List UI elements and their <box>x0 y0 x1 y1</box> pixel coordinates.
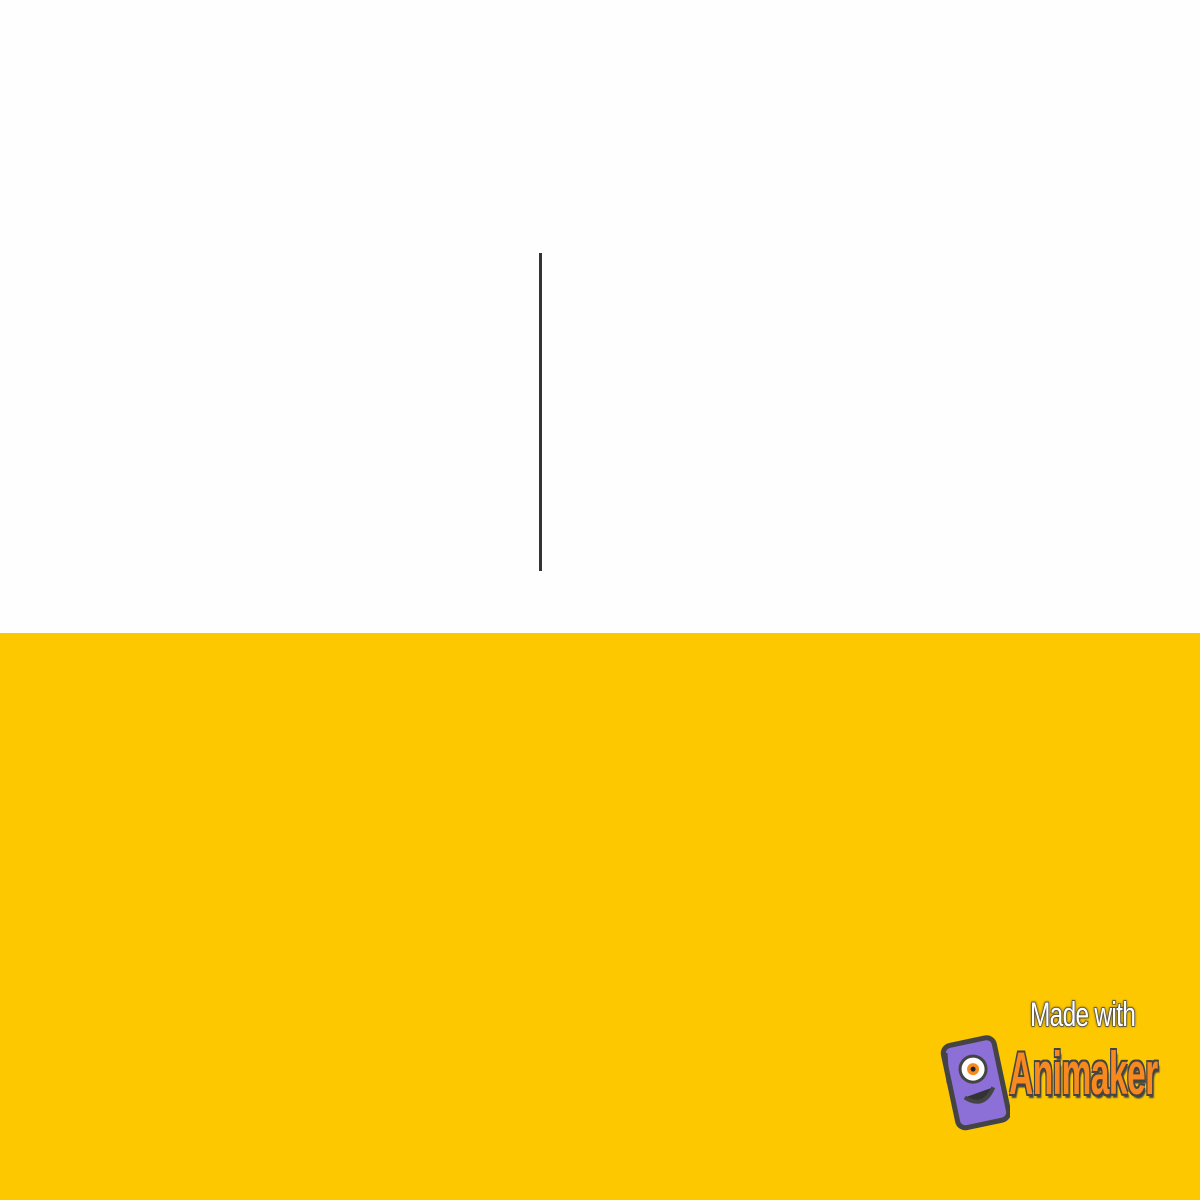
text: Made with: Made with <box>1030 996 1135 1034</box>
logo: Made with Animaker <box>940 996 1160 1130</box>
icon: purple monster <box>940 1035 1010 1130</box>
yellow bottom panel <box>0 633 1200 1200</box>
text: Animaker: Animaker <box>1009 1040 1158 1107</box>
white top panel <box>0 0 1200 633</box>
vertical line <box>539 253 542 571</box>
